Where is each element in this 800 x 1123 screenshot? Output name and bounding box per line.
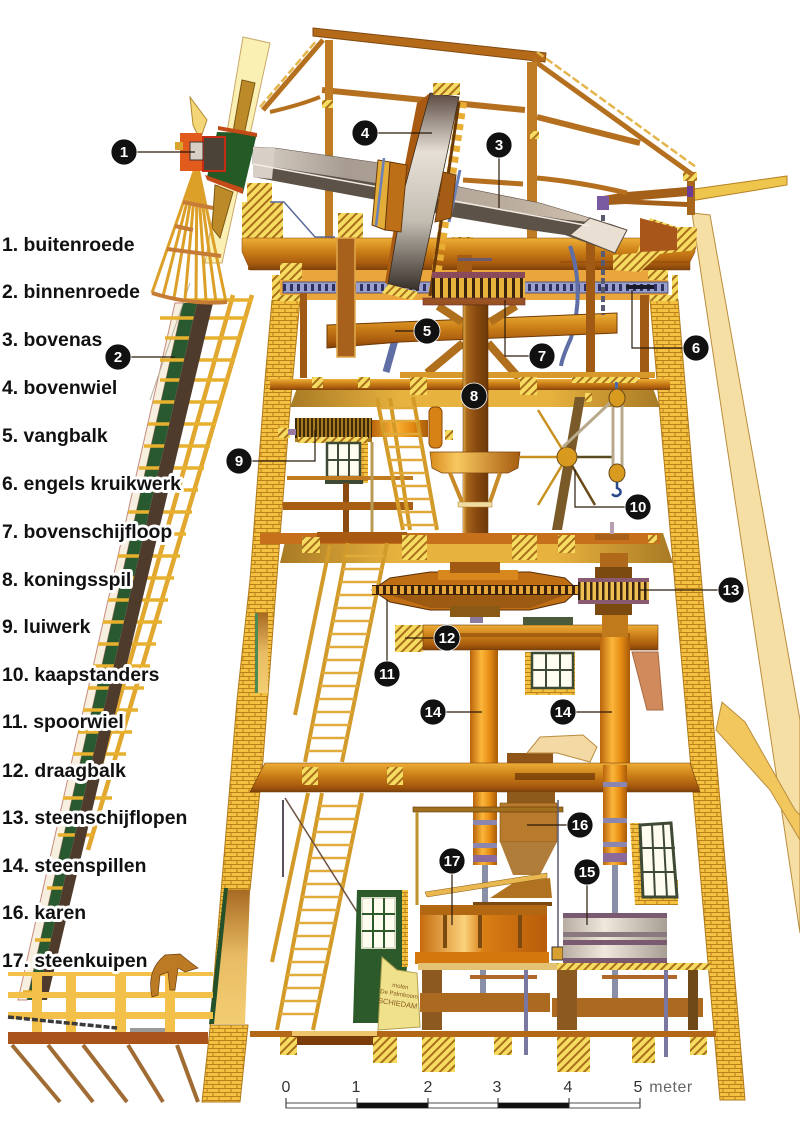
cat on fence <box>151 954 198 997</box>
head with red frame and green block <box>175 126 257 194</box>
number badge 9 <box>226 448 252 474</box>
outer sail board <box>205 37 270 263</box>
upper window in loft <box>327 443 368 483</box>
number badge 4: 4 <box>361 125 370 142</box>
number badge 15 <box>574 859 600 885</box>
number badge 5: 5 <box>423 323 431 340</box>
draagbalk support beam <box>395 625 663 710</box>
upper lantern gear <box>423 255 525 305</box>
legend: 9. luiwerk <box>2 616 91 638</box>
karen hopper <box>413 792 563 960</box>
spindle shafts <box>470 615 630 767</box>
number badge 12 <box>434 625 460 651</box>
legend: 7. bovenschijfloop <box>2 521 172 543</box>
number badge 5 <box>414 318 440 344</box>
kaapstander capstan and pulleys <box>520 382 625 530</box>
number badge 17: 17 <box>444 853 460 870</box>
number badge 2: 2 <box>114 349 122 366</box>
scale bar: 0 <box>282 1079 291 1096</box>
legend: 17. steenkuipen <box>2 950 148 972</box>
vang brake band <box>386 246 578 372</box>
catch beam vangbalk <box>327 313 617 348</box>
king shaft <box>463 305 488 565</box>
chain <box>8 1017 117 1028</box>
winch rope <box>370 442 374 557</box>
legend: 4. bovenwiel <box>2 377 117 399</box>
upper spindle bell <box>430 452 520 565</box>
number badge 13 <box>718 577 744 603</box>
fan lattice outer blade <box>152 97 227 303</box>
number badge 3: 3 <box>495 137 503 154</box>
number badge 1 <box>111 139 137 165</box>
leader lines <box>118 133 731 925</box>
legend <box>2 234 187 972</box>
sack of flour: molen <box>392 983 409 991</box>
wall panel upper <box>255 613 268 693</box>
king post braces <box>427 306 519 378</box>
steenschijfloop stone nut gear <box>578 522 649 615</box>
hatch support blocks <box>242 183 473 255</box>
number badge 13: 13 <box>723 582 739 599</box>
number badge 14 right <box>550 699 576 725</box>
loft planks <box>283 476 413 533</box>
number badge 3 <box>486 132 512 158</box>
lower ladder <box>272 793 383 1030</box>
legend: 8. koningsspil <box>2 569 131 591</box>
brake shoe and end cap at tail <box>613 218 697 272</box>
number badge 14 left <box>420 699 446 725</box>
steenkuip millstone tub <box>415 873 557 970</box>
legend: 3. bovenas <box>2 329 102 351</box>
legend: 6. engels kruikwerk <box>2 473 181 495</box>
scale bar: 3 <box>493 1079 502 1096</box>
number badge 10 <box>625 494 651 520</box>
number badge 6 <box>683 335 709 361</box>
wall panel lower <box>209 888 250 1024</box>
sack of flour <box>377 957 420 1030</box>
number badge 12: 12 <box>439 630 455 647</box>
number badge 15: 15 <box>579 864 595 881</box>
exposed millstone <box>563 913 667 963</box>
luiwerk winch <box>278 407 453 448</box>
legend: 5. vangbalk <box>2 425 108 447</box>
green door with window <box>353 890 408 1023</box>
number badge 11: 11 <box>379 666 395 683</box>
number badge 4 <box>352 120 378 146</box>
right brick wall <box>650 300 745 1100</box>
legend: 2. binnenroede <box>2 281 140 303</box>
number badge 8 <box>461 383 487 409</box>
top cap beam <box>242 238 695 301</box>
scale bar <box>282 1079 693 1108</box>
number badge 11 <box>374 661 400 687</box>
number badge 8: 8 <box>470 388 478 405</box>
scale bar: 2 <box>424 1079 433 1096</box>
short upper ladder <box>377 397 437 530</box>
legend: 12. draagbalk <box>2 760 126 782</box>
platform and base frame <box>420 963 710 1057</box>
number badge 7: 7 <box>538 348 546 365</box>
number badge 7 <box>529 343 555 369</box>
legend: 11. spoorwiel <box>2 711 124 733</box>
legend: 16. karen <box>2 902 86 924</box>
lower spindle sections <box>473 765 627 915</box>
posts under cap <box>300 215 649 382</box>
beige blob and block <box>507 735 597 765</box>
legend: 10. kaapstanders <box>2 664 159 686</box>
blue tie rod <box>270 202 335 237</box>
sack of flour: SCHIEDAM <box>377 996 418 1011</box>
number badge 6: 6 <box>692 340 700 357</box>
number badge 14 left: 14 <box>425 704 442 721</box>
lower right diagonal sail piece <box>716 702 800 840</box>
scale bar: 4 <box>564 1079 573 1096</box>
left brick wall <box>202 300 300 1102</box>
right sail arm <box>597 172 787 215</box>
main axle bovenas <box>253 147 627 253</box>
number badge 17 <box>439 848 465 874</box>
number badge 10: 10 <box>630 499 646 516</box>
inner sail stripes and lattice <box>18 283 252 1000</box>
number badge 14 right: 14 <box>555 704 572 721</box>
scale bar: 1 <box>352 1079 361 1096</box>
window behind beam <box>523 617 575 695</box>
middle floor beam <box>260 532 673 563</box>
number badge 2 <box>105 344 131 370</box>
scale bar: 5 <box>634 1079 643 1096</box>
number badge 1: 1 <box>120 144 128 161</box>
sack of flour: De Palmboom <box>380 989 418 1001</box>
number badge 9: 9 <box>235 453 243 470</box>
scale bar: meter <box>649 1079 693 1096</box>
spoorwiel great spur wheel <box>372 562 578 623</box>
long middle ladder <box>295 543 387 762</box>
deck and fence on left <box>8 972 213 1102</box>
bottom floor <box>250 1031 716 1072</box>
legend: 14. steenspillen <box>2 855 146 877</box>
number badge 16 <box>567 812 593 838</box>
floor beam two <box>270 372 670 407</box>
bovenwiel brake wheel <box>372 83 462 300</box>
lower floor beam <box>250 763 700 792</box>
legend: 1. buitenroede <box>2 234 135 256</box>
legend: 13. steenschijflopen <box>2 807 187 829</box>
side window with brick <box>630 823 678 905</box>
engels kruikwerk rod <box>283 282 668 293</box>
right sail board <box>692 213 800 933</box>
number badge 16: 16 <box>572 817 588 834</box>
roof frame <box>260 28 696 243</box>
